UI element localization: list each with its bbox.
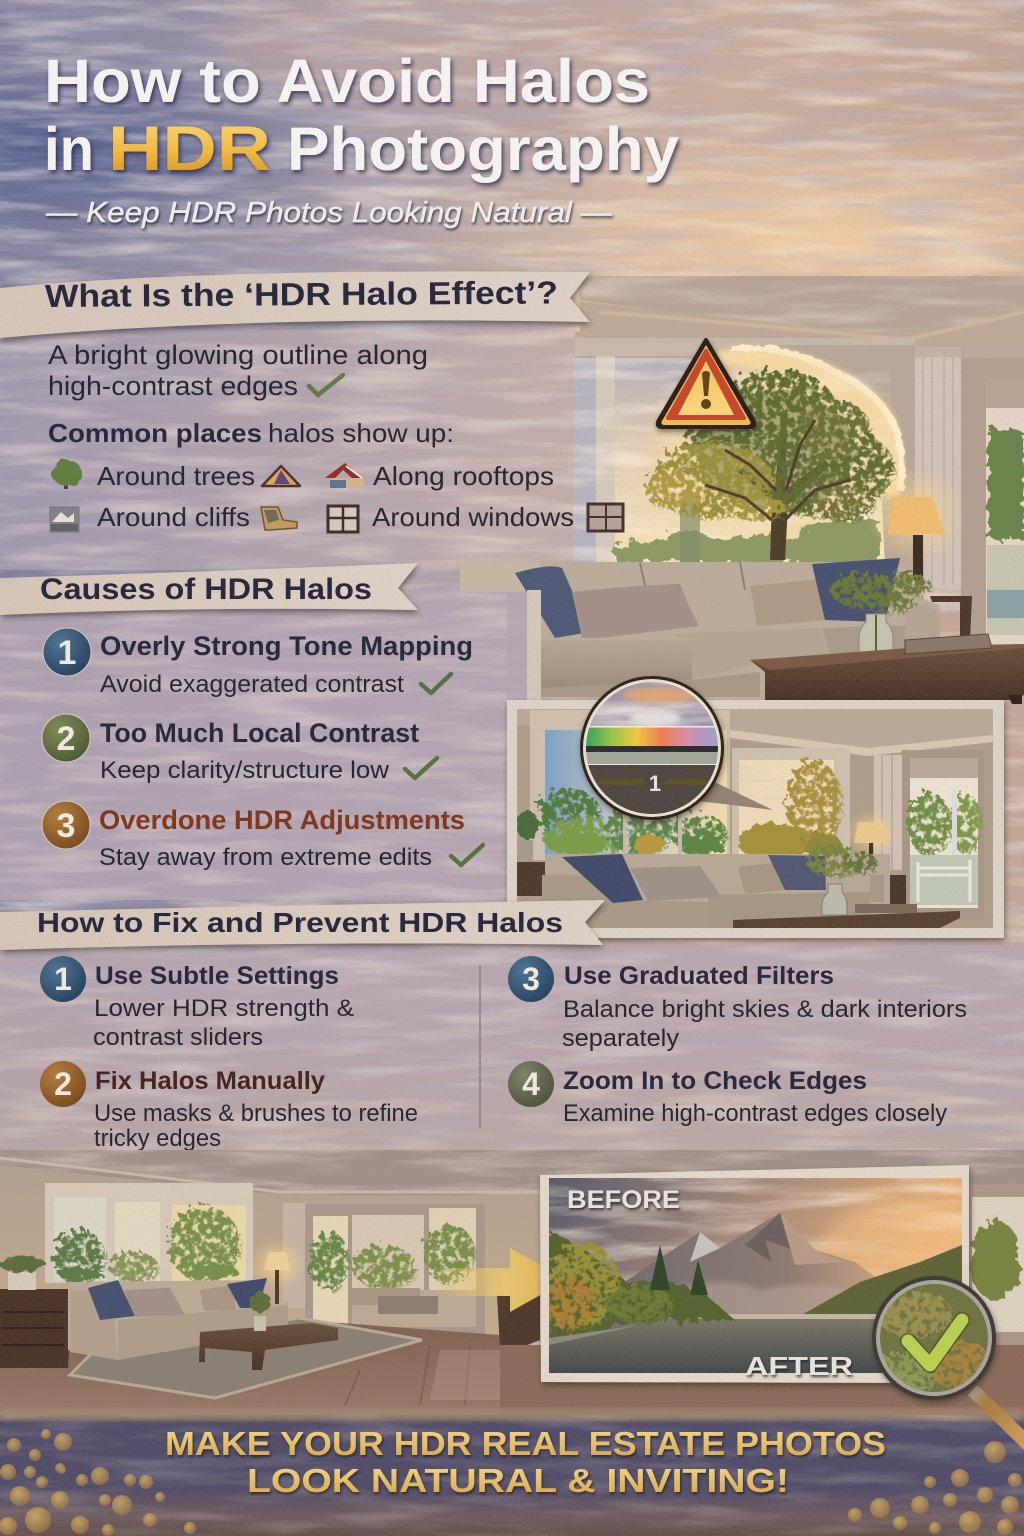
banner: causes bbox=[0, 563, 418, 615]
text block: common places bbox=[48, 418, 454, 448]
fix item 1: Use Subtle Settings bbox=[95, 962, 339, 990]
icon: mountain triangle bbox=[262, 466, 300, 486]
halo around tree bbox=[716, 348, 903, 500]
call to action: LOOK NATURAL & INVITING! bbox=[247, 1462, 789, 1499]
list: halo locations: Around windows bbox=[372, 502, 574, 532]
curtain bbox=[874, 755, 902, 870]
curtain bbox=[283, 1203, 307, 1308]
icon: house roof bbox=[325, 463, 364, 488]
list: halo locations: Around trees bbox=[97, 461, 255, 491]
fix item 2: Fix Halos Manually bbox=[95, 1067, 325, 1095]
causes item 3: 3 bbox=[57, 807, 75, 845]
pillows bbox=[562, 854, 643, 903]
floor right bbox=[500, 1345, 1024, 1420]
window with sky bbox=[615, 358, 915, 563]
causes item 1: Overly Strong Tone Mapping bbox=[100, 631, 473, 661]
icon: check mark bbox=[309, 375, 343, 395]
fix item 2: tricky edges bbox=[94, 1125, 221, 1152]
back wall bbox=[0, 1165, 540, 1340]
sofa bbox=[460, 562, 940, 697]
title: in bbox=[44, 115, 94, 183]
fix item 4: 4 bbox=[522, 1066, 540, 1102]
fix item 3: Use Graduated Filters bbox=[564, 962, 834, 990]
books + table bbox=[855, 904, 917, 913]
title: How to Avoid Halos bbox=[44, 47, 650, 115]
text block: common places: Common places bbox=[48, 418, 262, 448]
title bbox=[44, 47, 679, 184]
fix item 2 bbox=[40, 1061, 418, 1152]
inset photo: room with magnifier bbox=[507, 676, 1004, 938]
ceiling bbox=[575, 276, 1024, 352]
fix item 1: contrast sliders bbox=[93, 1024, 263, 1051]
fix item 1: 1 bbox=[54, 961, 72, 997]
icon: cliff picture bbox=[50, 507, 79, 532]
left windows bbox=[45, 1183, 253, 1283]
subtitle: — Keep HDR Photos Looking Natural — bbox=[45, 197, 613, 229]
banner: What Is the HDR Halo Effect bbox=[0, 271, 590, 338]
arrow bbox=[432, 1248, 567, 1312]
far right wall bbox=[965, 1185, 1024, 1345]
fix item 3: 3 bbox=[522, 961, 540, 997]
far hillside right bbox=[800, 1245, 962, 1320]
call to action: MAKE YOUR HDR REAL ESTATE PHOTOS bbox=[165, 1425, 886, 1462]
side frame bbox=[527, 590, 541, 700]
label: before: BEFORE bbox=[567, 1186, 680, 1214]
lamp bbox=[866, 465, 966, 585]
causes item 2: 2 bbox=[57, 720, 75, 758]
causes item 3: Stay away from extreme edits bbox=[99, 844, 432, 871]
rug bbox=[70, 1318, 422, 1398]
call to action bbox=[165, 1425, 886, 1499]
fix item 4: Examine high-contrast edges closely bbox=[563, 1100, 947, 1127]
vase bbox=[249, 1292, 271, 1331]
right glass door bbox=[961, 358, 1024, 648]
lake bbox=[549, 1318, 883, 1373]
causes item 1: 1 bbox=[58, 634, 76, 672]
text block: halo definition: high-contrast edges bbox=[48, 371, 298, 401]
right window bbox=[732, 748, 850, 858]
fix item 3: separately bbox=[562, 1025, 679, 1052]
plant + vase bbox=[807, 846, 878, 878]
plant in vase bbox=[832, 574, 932, 654]
label: after: AFTER bbox=[745, 1351, 853, 1381]
banner: causes: Causes of HDR Halos bbox=[40, 573, 372, 606]
wall to the right of the window bbox=[760, 345, 965, 565]
sofa bbox=[545, 854, 890, 914]
list: halo locations: Around cliffs bbox=[97, 502, 250, 532]
magnifier lens bbox=[580, 676, 730, 820]
curtain bbox=[915, 346, 961, 588]
text block: halo definition: A bright glowing outline along bbox=[48, 340, 428, 370]
causes item 1: Avoid exaggerated contrast bbox=[100, 671, 404, 698]
banner: What Is the HDR Halo Effect: What Is the ‘HDR Halo Effect’? bbox=[45, 274, 558, 314]
fix item 2: 2 bbox=[54, 1066, 72, 1102]
pillows bbox=[515, 558, 900, 638]
panel: text panel background bbox=[0, 330, 1024, 1155]
illustration: main living room with halo tree bbox=[460, 276, 1024, 704]
list: halo locations bbox=[50, 460, 623, 532]
banner: how to fix: How to Fix and Prevent HDR Halos bbox=[37, 907, 563, 938]
text block: common places: halos show up: bbox=[268, 418, 454, 448]
left trees bbox=[549, 1230, 735, 1342]
lamp bbox=[850, 812, 892, 854]
fix item 4: Zoom In to Check Edges bbox=[563, 1067, 867, 1095]
coffee table bbox=[199, 1323, 338, 1370]
floor bbox=[0, 1320, 540, 1420]
fix item 1 bbox=[40, 956, 354, 1051]
fix item 3 bbox=[508, 956, 967, 1052]
text block: halo definition bbox=[48, 340, 428, 401]
distant trees bbox=[615, 519, 880, 563]
fix item 1: Lower HDR strength & bbox=[94, 995, 354, 1022]
causes item 2: Keep clarity/structure low bbox=[100, 757, 390, 784]
callout pointer bbox=[690, 775, 773, 810]
CTA band bbox=[0, 1408, 1024, 1536]
icon: sofa bbox=[261, 507, 297, 530]
list: halo locations: Along rooftops bbox=[373, 461, 554, 491]
illustration: bottom living room bbox=[0, 1150, 1024, 1420]
sofa bbox=[68, 1280, 288, 1360]
causes item 1 bbox=[43, 628, 473, 698]
icon: window small bbox=[588, 504, 623, 531]
icon: tree bbox=[52, 460, 82, 489]
coffee table bbox=[750, 644, 1024, 704]
door bbox=[902, 750, 922, 752]
side table bbox=[930, 596, 972, 640]
ceiling bbox=[0, 1150, 1024, 1195]
plant on cabinet bbox=[0, 1256, 46, 1290]
cabinet bbox=[0, 1289, 72, 1368]
sliding door bbox=[305, 1204, 485, 1337]
tree bbox=[645, 371, 895, 560]
left window bbox=[530, 710, 730, 860]
causes item 3: Overdone HDR Adjustments bbox=[99, 805, 465, 835]
left plant bbox=[516, 811, 538, 839]
banner: how to fix bbox=[0, 900, 605, 950]
before/after photo bbox=[540, 1165, 980, 1383]
lamp bbox=[249, 1239, 305, 1291]
bokeh: gold lights bbox=[0, 1429, 1022, 1536]
pillows bbox=[88, 1280, 135, 1320]
fix item 2: Use masks & brushes to refine bbox=[94, 1100, 418, 1127]
magnifier lens: 1 bbox=[649, 771, 661, 796]
fix item 4 bbox=[508, 1061, 947, 1127]
title: Photography bbox=[287, 115, 679, 183]
title: HDR bbox=[108, 114, 271, 184]
causes item 3 bbox=[42, 801, 483, 871]
dresser under photo bbox=[497, 1295, 540, 1348]
magnifier with check mark bbox=[872, 1276, 1024, 1450]
icon: window bbox=[328, 506, 358, 532]
fix item 3: Balance bright skies & dark interiors bbox=[563, 996, 967, 1023]
icon: warning triangle bbox=[658, 340, 754, 427]
books bbox=[905, 634, 992, 654]
causes item 2 bbox=[42, 714, 437, 784]
causes item 2: Too Much Local Contrast bbox=[100, 718, 419, 748]
